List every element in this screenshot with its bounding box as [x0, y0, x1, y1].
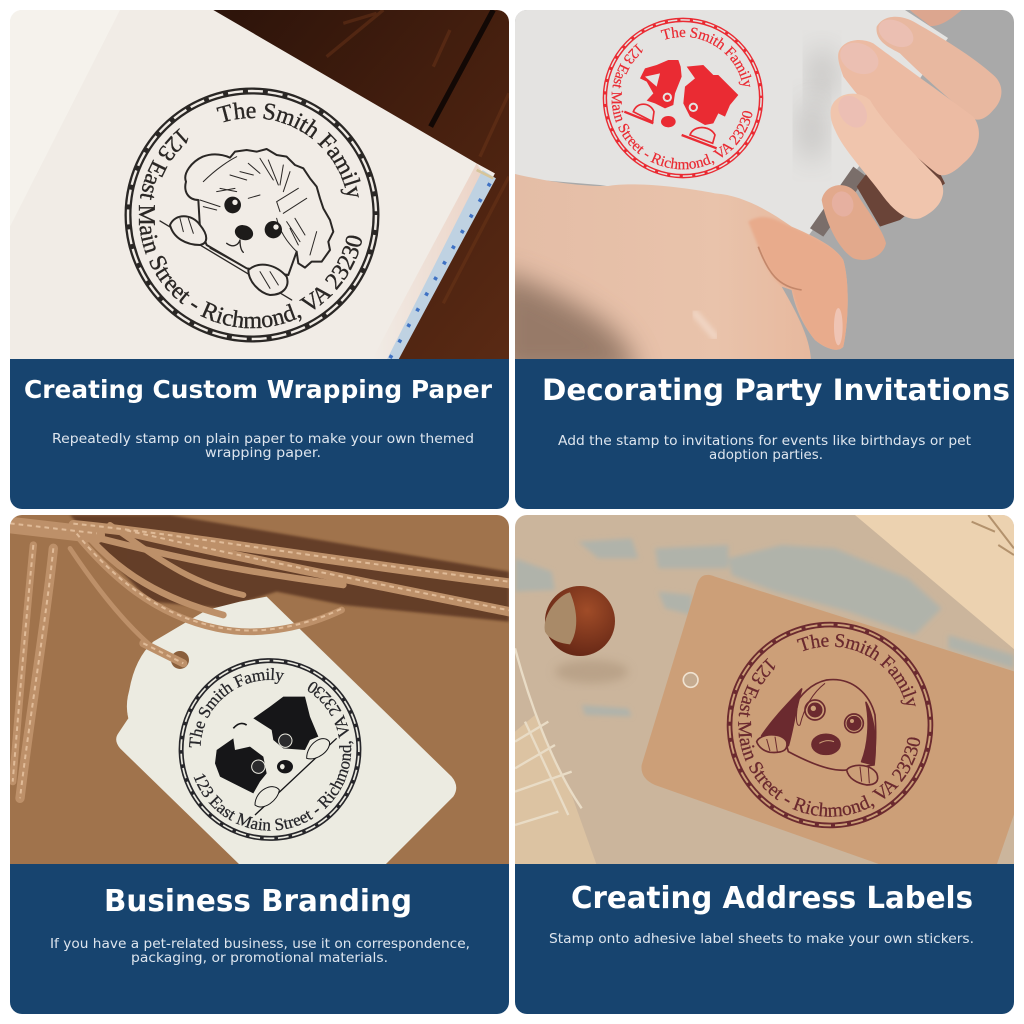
- panel: creating address labels: [515, 515, 1014, 1014]
- caption band: [10, 864, 509, 1014]
- icon: fluffy puppy: [160, 149, 333, 300]
- photo: kraft label on wood table: [515, 515, 1015, 865]
- description: Stamp onto adhesive label sheets to make your own stickers.: [549, 932, 974, 947]
- description: Add the stamp to invitations for events like birthdays or pet: [558, 434, 971, 449]
- stamp: round address imprint, red: 123 East Main Street - Richmond, VA 23230: [612, 43, 752, 170]
- description: wrapping paper.: [205, 446, 321, 461]
- description: packaging, or promotional materials.: [131, 951, 388, 966]
- fingers: [810, 10, 1001, 260]
- photo: hand holding stamped card: [495, 10, 1014, 377]
- icon: black and white puppy: [215, 697, 337, 815]
- stamp: round address imprint, maroon: 123 East Main Street - Richmond, VA 23230: [738, 658, 920, 817]
- description: If you have a pet-related business, use it on correspondence,: [50, 937, 470, 952]
- description: adoption parties.: [709, 448, 823, 463]
- heading: Creating Custom Wrapping Paper: [24, 375, 493, 404]
- icon: red collie puppy: [624, 60, 738, 148]
- panel: decorating party invitations: [515, 10, 1014, 509]
- caption band: [10, 359, 509, 509]
- stamp: round address imprint, black: The Smith Family: [216, 102, 361, 198]
- heading: Business Branding: [104, 884, 412, 919]
- stamp: round address imprint, maroon: The Smith Family: [796, 634, 916, 706]
- stamp: round address imprint, red: The Smith Family: [660, 27, 752, 87]
- twine highlights: [10, 523, 509, 798]
- hand and thumb: [515, 174, 848, 359]
- stamp: round address imprint, black: 123 East Main Street - Richmond, VA 23230: [138, 128, 362, 328]
- description: [50, 937, 470, 966]
- panel: creating custom wrapping paper: [10, 10, 509, 509]
- stamp: round address imprint, black, rotated: 123 East Main Street - Richmond, VA 23230: [194, 682, 354, 831]
- icon: beagle puppy: [757, 680, 878, 785]
- caption band: [515, 359, 1014, 509]
- photo: stamped book page on wood: [10, 10, 510, 360]
- photo: gift tag with twine on kraft paper: [10, 515, 510, 865]
- description: [52, 432, 474, 461]
- heading: Decorating Party Invitations: [542, 373, 1010, 407]
- description: [558, 434, 971, 463]
- caption band: [515, 864, 1014, 1014]
- stamp: round address imprint, black, rotated: The Smith Family: [188, 668, 284, 748]
- heading: Creating Address Labels: [571, 881, 973, 916]
- panel: business branding: [10, 515, 509, 1014]
- description: Repeatedly stamp on plain paper to make your own themed: [52, 432, 474, 447]
